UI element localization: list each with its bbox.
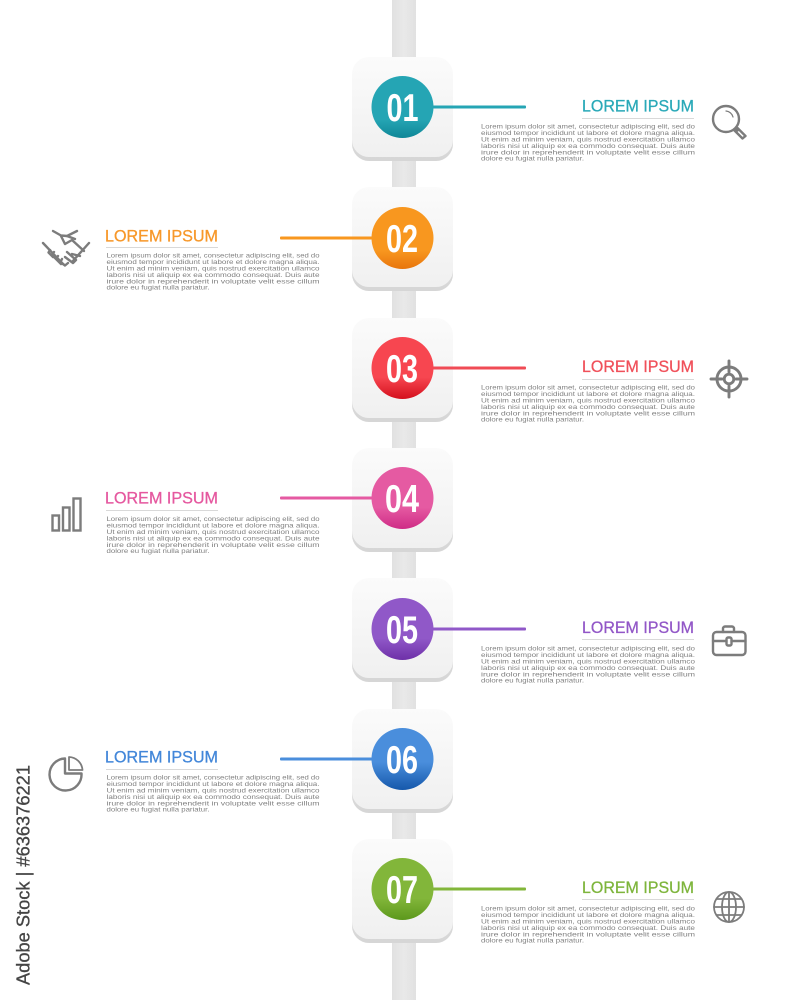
text block 03 xyxy=(481,385,696,424)
step 01 xyxy=(352,57,746,163)
icon: magnifier xyxy=(713,106,746,138)
connector 03 xyxy=(430,366,526,370)
text block 05 xyxy=(481,646,696,685)
number badge 01: 01 xyxy=(386,87,418,130)
step 04 xyxy=(52,448,453,555)
heading 02: LOREM IPSUM xyxy=(105,226,218,246)
text block 06: laboris nisi ut aliquip ex ea commodo consequat. Duis aute xyxy=(106,794,320,801)
text block 06: irure dolor in reprehenderit in voluptate velit esse cillum xyxy=(106,800,320,807)
heading 03: LOREM IPSUM xyxy=(582,357,694,376)
number badge 07 xyxy=(372,858,434,920)
text block 02: laboris nisi ut aliquip ex ea commodo consequat. Duis aute xyxy=(106,272,320,279)
connector 07 xyxy=(430,888,526,890)
text block 03: laboris nisi ut aliquip ex ea commodo consequat. Duis aute xyxy=(481,404,695,411)
number badge 02 xyxy=(372,207,434,269)
heading 05: LOREM IPSUM xyxy=(582,618,694,637)
text block 06: Ut enim ad minim veniam, quis nostrud exercitation ullamco xyxy=(106,788,320,794)
number badge 01 xyxy=(372,76,434,138)
heading 06: LOREM IPSUM xyxy=(105,748,218,766)
card 02 xyxy=(352,187,453,291)
icon: pie chart xyxy=(50,757,82,790)
step 05 xyxy=(352,578,746,685)
number badge 03: 03 xyxy=(386,348,418,391)
card 06 xyxy=(352,709,453,813)
text block 05: dolore eu fugiat nulla pariatur. xyxy=(481,678,584,685)
connector 05 xyxy=(430,628,526,630)
icon: bar chart xyxy=(52,498,80,530)
text block 01: laboris nisi ut aliquip ex ea commodo consequat. Duis aute xyxy=(481,143,695,150)
number badge 05 xyxy=(372,598,434,660)
icon: briefcase xyxy=(713,626,746,655)
number badge 06: 06 xyxy=(386,739,418,782)
text block 07 xyxy=(481,906,696,945)
text block 06: eiusmod tempor incididunt ut labore et dolore magna aliqua. xyxy=(106,781,320,788)
text block 05: irure dolor in reprehenderit in voluptate velit esse cillum xyxy=(481,671,696,678)
text block 07: eiusmod tempor incididunt ut labore et dolore magna aliqua. xyxy=(481,912,695,919)
connector 02 xyxy=(280,236,376,240)
icon: handshake xyxy=(43,231,89,266)
text block 01: irure dolor in reprehenderit in voluptate velit esse cillum xyxy=(481,149,696,156)
step 03 xyxy=(352,318,747,424)
text block 01 xyxy=(481,124,696,163)
number badge 04 xyxy=(372,467,434,529)
text block 07: irure dolor in reprehenderit in voluptate velit esse cillum xyxy=(481,931,696,938)
text block 07: Ut enim ad minim veniam, quis nostrud exercitation ullamco xyxy=(481,918,695,926)
card 03 xyxy=(352,318,453,422)
text block 03: Ut enim ad minim veniam, quis nostrud exercitation ullamco xyxy=(481,398,695,404)
step 06 xyxy=(50,709,453,814)
heading 01: LOREM IPSUM xyxy=(582,96,694,116)
text block 02: irure dolor in reprehenderit in voluptate velit esse cillum xyxy=(106,278,320,285)
card 05 xyxy=(352,578,453,682)
text block 02: dolore eu fugiat nulla pariatur. xyxy=(106,285,210,292)
number badge 06 xyxy=(372,728,434,790)
text block 01: eiusmod tempor incididunt ut labore et dolore magna aliqua. xyxy=(481,130,695,137)
text block 04: Lorem ipsum dolor sit amet, consectetur adipiscing elit, sed do xyxy=(106,516,320,523)
text block 03: irure dolor in reprehenderit in voluptate velit esse cillum xyxy=(481,410,696,417)
stock credit: Adobe Stock | #636376221 xyxy=(12,765,34,985)
text block 07: Lorem ipsum dolor sit amet, consectetur adipiscing elit, sed do xyxy=(481,906,695,913)
text block 06 xyxy=(106,775,320,814)
text block 04: dolore eu fugiat nulla pariatur. xyxy=(106,548,210,555)
text block 07: dolore eu fugiat nulla pariatur. xyxy=(481,938,584,945)
heading 07: LOREM IPSUM xyxy=(582,878,694,897)
text block 04: Ut enim ad minim veniam, quis nostrud exercitation ullamco xyxy=(106,529,320,536)
text block 02: Lorem ipsum dolor sit amet, consectetur adipiscing elit, sed do xyxy=(106,253,320,260)
card 01 xyxy=(352,57,453,161)
text block 03: eiusmod tempor incididunt ut labore et dolore magna aliqua. xyxy=(481,391,695,398)
text block 06: dolore eu fugiat nulla pariatur. xyxy=(106,807,210,814)
number badge 05: 05 xyxy=(386,609,418,652)
number badge 02: 02 xyxy=(386,218,418,261)
number badge 03 xyxy=(372,337,434,399)
connector 06 xyxy=(280,758,376,760)
heading 04: LOREM IPSUM xyxy=(105,488,218,508)
text block 05: Ut enim ad minim veniam, quis nostrud exercitation ullamco xyxy=(481,658,695,666)
number badge 04: 04 xyxy=(385,478,419,521)
text block 02 xyxy=(106,253,320,292)
icon: globe xyxy=(714,892,744,922)
step 07 xyxy=(352,839,744,945)
text block 05: laboris nisi ut aliquip ex ea commodo consequat. Duis aute xyxy=(481,665,695,672)
text block 04: irure dolor in reprehenderit in voluptate velit esse cillum xyxy=(106,542,320,549)
text block 03: Lorem ipsum dolor sit amet, consectetur adipiscing elit, sed do xyxy=(481,385,695,392)
text block 01: Ut enim ad minim veniam, quis nostrud exercitation ullamco xyxy=(481,136,695,144)
vertical timeline column xyxy=(392,0,416,1000)
text block 05: eiusmod tempor incididunt ut labore et dolore magna aliqua. xyxy=(481,652,695,659)
text block 06: Lorem ipsum dolor sit amet, consectetur adipiscing elit, sed do xyxy=(106,775,320,782)
text block 01: Lorem ipsum dolor sit amet, consectetur adipiscing elit, sed do xyxy=(481,124,695,131)
text block 02: eiusmod tempor incididunt ut labore et dolore magna aliqua. xyxy=(106,259,320,266)
text block 01: dolore eu fugiat nulla pariatur. xyxy=(481,156,584,163)
step 02 xyxy=(43,187,453,292)
text block 04 xyxy=(106,516,320,555)
connector 04 xyxy=(280,496,376,500)
text block 05: Lorem ipsum dolor sit amet, consectetur adipiscing elit, sed do xyxy=(481,646,695,653)
card 07 xyxy=(352,839,453,943)
text block 02: Ut enim ad minim veniam, quis nostrud exercitation ullamco xyxy=(106,266,320,272)
number badge 07: 07 xyxy=(386,869,418,912)
text block 04: eiusmod tempor incididunt ut labore et dolore magna aliqua. xyxy=(106,523,320,530)
connector 01 xyxy=(430,106,526,108)
text block 04: laboris nisi ut aliquip ex ea commodo consequat. Duis aute xyxy=(106,535,320,542)
text block 07: laboris nisi ut aliquip ex ea commodo consequat. Duis aute xyxy=(481,925,695,932)
icon: target xyxy=(711,361,747,397)
text block 03: dolore eu fugiat nulla pariatur. xyxy=(481,417,584,424)
card 04 xyxy=(352,448,453,552)
